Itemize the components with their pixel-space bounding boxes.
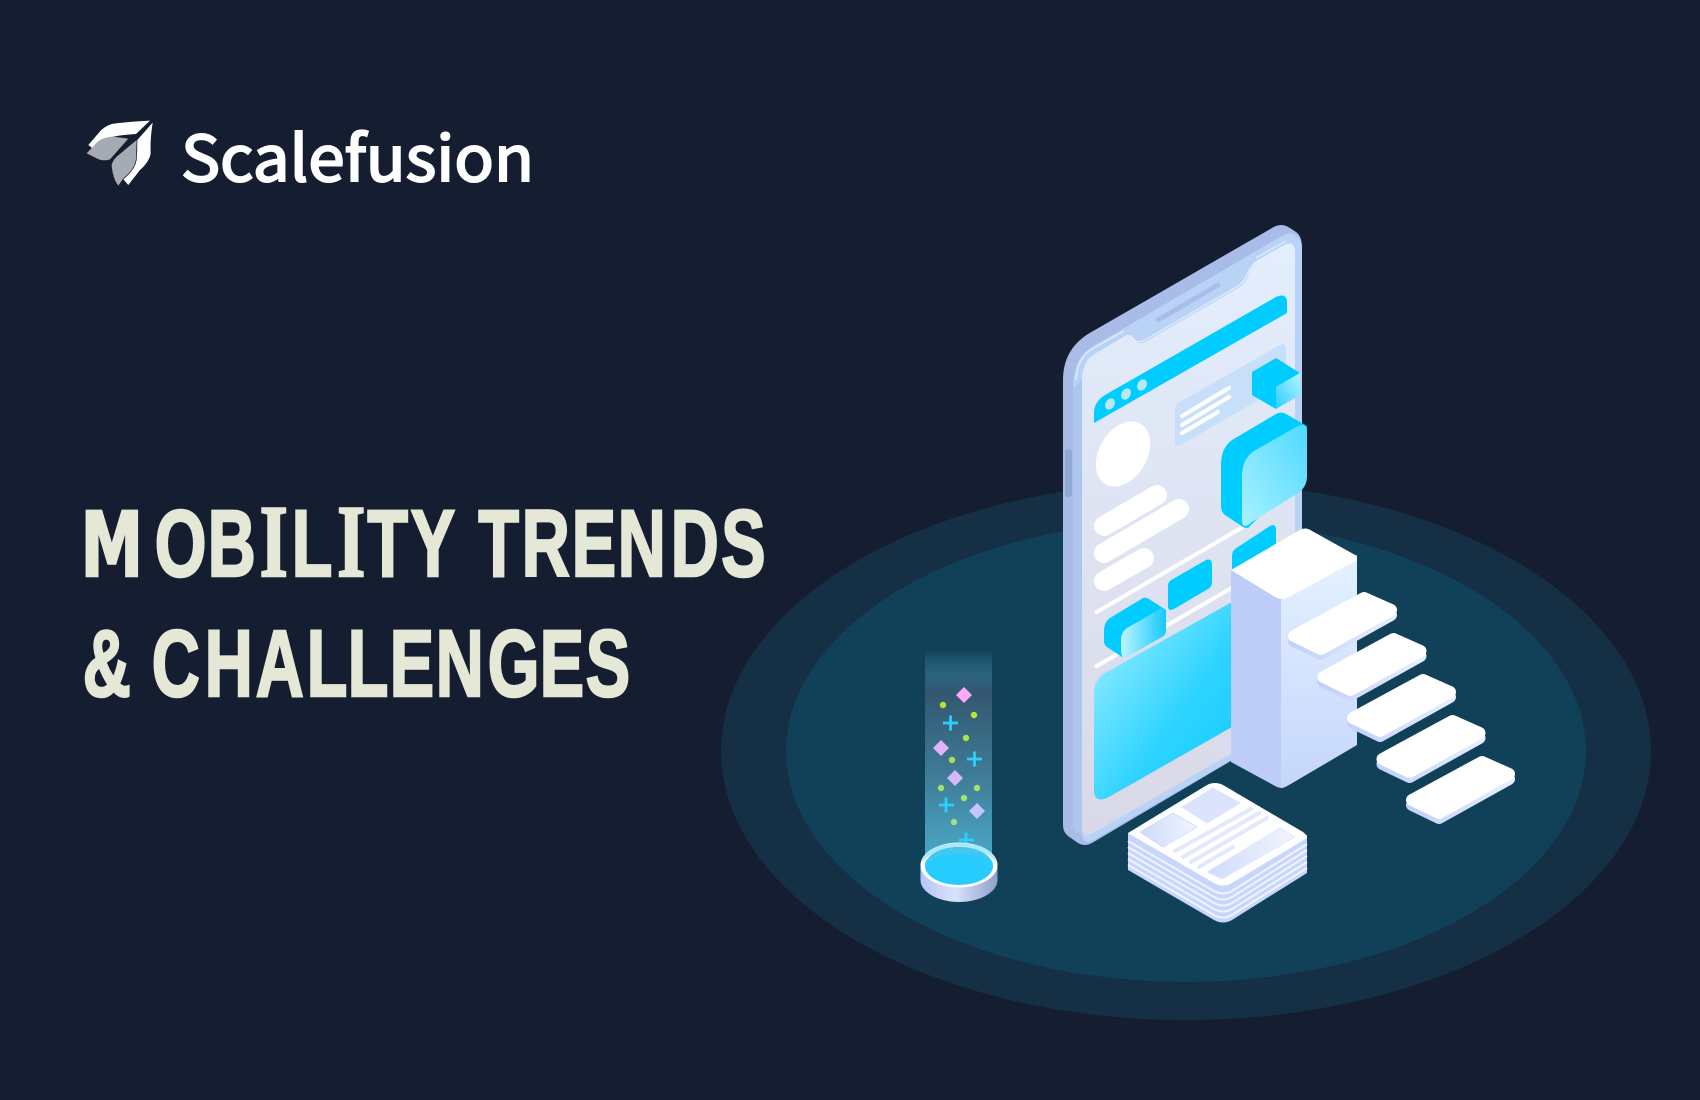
glowing base	[920, 842, 998, 902]
separator lines	[1095, 527, 1243, 667]
title line 1: D	[671, 491, 719, 597]
avatar circle	[1085, 412, 1161, 496]
title line 1: M	[81, 495, 143, 598]
paper image block 1	[1140, 813, 1197, 847]
cyan tile behind tower	[1232, 525, 1276, 570]
particles: dots	[938, 702, 980, 825]
brand name: Scalefusion	[181, 109, 534, 200]
cyan tile	[1168, 560, 1212, 610]
title line 2: A	[256, 611, 304, 717]
smartphone	[1063, 225, 1307, 845]
title line 1: R	[522, 491, 570, 597]
media panel	[1094, 602, 1232, 799]
particles: plus signs	[939, 716, 982, 848]
speaker	[1158, 285, 1218, 320]
paper text lines	[1175, 809, 1267, 867]
step 1	[1294, 598, 1391, 654]
small floating cube	[1252, 358, 1300, 409]
profile text pills	[1104, 495, 1179, 581]
tower	[1231, 528, 1357, 788]
title line 1: I	[337, 486, 365, 599]
info card	[1175, 344, 1286, 446]
title line 1: T	[367, 491, 408, 597]
paper top sheet	[1128, 783, 1307, 886]
logo	[87, 109, 534, 200]
small floating block	[1104, 598, 1166, 657]
tower left face	[1231, 570, 1282, 788]
info card lines	[1182, 388, 1229, 433]
phone bezel	[1073, 234, 1302, 842]
title line 2: N	[436, 611, 484, 717]
tower top	[1231, 528, 1357, 599]
title line 2: L	[348, 611, 388, 717]
light beam device	[920, 650, 998, 902]
bezel highlight	[1076, 241, 1286, 380]
title line 2: E	[390, 611, 434, 717]
outer platform ellipse	[721, 482, 1651, 1020]
particles: diamonds	[933, 687, 985, 819]
step 3	[1353, 680, 1450, 736]
title line 1: N	[618, 491, 666, 597]
title line 2: E	[540, 611, 584, 717]
tower right face	[1281, 555, 1357, 788]
browser bar	[1094, 295, 1287, 423]
light beam	[925, 650, 992, 860]
title line 1: I	[260, 486, 288, 599]
title line 1: E	[572, 491, 616, 597]
title line 1: B	[208, 491, 256, 597]
icon: Scalefusion leaf mark	[87, 121, 153, 186]
title line 2: &	[83, 611, 131, 717]
step 5	[1412, 762, 1509, 818]
title line 1: T	[478, 491, 519, 597]
title line 1: Y	[411, 491, 455, 597]
title line 1: L	[292, 491, 332, 597]
step 4	[1382, 721, 1480, 777]
title	[81, 486, 766, 717]
stair steps	[1294, 598, 1509, 818]
paper stack sides	[1128, 833, 1307, 922]
side button	[1065, 449, 1072, 497]
title line 2: C	[152, 611, 200, 717]
paper image block 2	[1182, 788, 1240, 823]
big floating block	[1221, 412, 1307, 528]
title line 2: L	[307, 611, 347, 717]
paper bottom block	[1207, 828, 1295, 879]
browser dots	[1103, 378, 1149, 411]
step 2	[1324, 639, 1420, 695]
document stack	[1128, 783, 1307, 922]
phone screen	[1082, 244, 1295, 835]
title line 1: O	[155, 491, 206, 597]
title line 2: H	[205, 611, 253, 717]
phone body	[1063, 225, 1302, 845]
title line 2: G	[488, 611, 539, 717]
inner platform ellipse	[786, 520, 1586, 982]
title line 1: S	[721, 491, 766, 597]
title line 2: S	[586, 611, 630, 717]
